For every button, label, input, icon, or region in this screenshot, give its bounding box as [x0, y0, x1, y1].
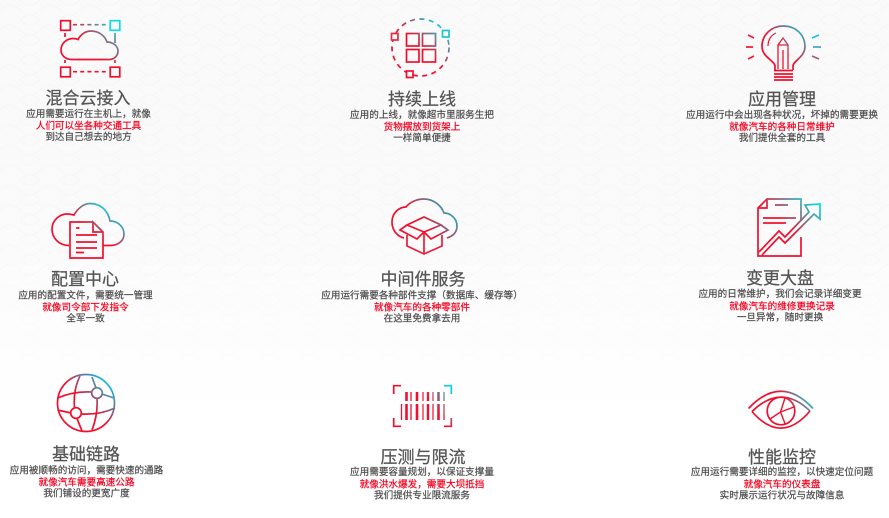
icon: globe network: [58, 374, 115, 432]
icon: cloud with document: [52, 204, 124, 258]
text block: 就像汽车的各种零部件: [374, 302, 470, 314]
icon: dashed ring with grid: [392, 19, 449, 78]
text block: 就像司令部下发指令: [42, 302, 129, 314]
heading: 配置中心: [51, 270, 119, 289]
text block: [26, 108, 151, 143]
text block: 我们提供专业限流服务: [374, 490, 470, 502]
text block: 一旦异常，随时更换: [737, 312, 824, 324]
text block: [686, 109, 878, 144]
panel: 混合云接入: [26, 21, 151, 143]
heading: 应用管理: [748, 90, 816, 109]
icon: cloud with open box: [392, 199, 457, 254]
text block: 应用运行中会出现各种状况，坏掉的需要更换: [686, 109, 878, 121]
heading: 持续上线: [388, 90, 456, 109]
text block: 到达自己想去的地方: [45, 131, 132, 143]
panel: 应用管理: [686, 26, 878, 144]
text block: 就像汽车需要高速公路: [39, 476, 135, 488]
text block: 应用被顺畅的访问，需要快速的通路: [10, 464, 164, 476]
text block: [350, 109, 494, 144]
text block: [321, 290, 523, 324]
text block: 我们铺设的更宽广度: [43, 488, 130, 500]
text block: 就像汽车的维修更换记录: [729, 300, 835, 312]
text block: 就像汽车的各种日常维护: [729, 121, 835, 133]
text block: [698, 288, 862, 324]
panel: 持续上线: [350, 19, 494, 144]
heading: 性能监控: [748, 448, 816, 467]
icon: document with rising arrow: [758, 199, 820, 256]
heading: 中间件服务: [380, 270, 466, 289]
text block: 我们提供全套的工具: [739, 132, 826, 144]
text block: 在这里免费拿去用: [384, 312, 460, 324]
text block: 应用需要运行在主机上，就像: [26, 108, 151, 120]
text block: [350, 466, 494, 502]
text block: 人们可以坐各种交通工具: [36, 120, 142, 132]
panel: 变更大盘: [698, 199, 862, 324]
text block: [10, 464, 164, 500]
panel: 性能监控: [691, 391, 874, 502]
heading: 变更大盘: [746, 269, 814, 288]
text block: 全军一致: [66, 312, 105, 324]
icon: cloud in selection frame: [61, 21, 120, 77]
text block: [691, 466, 874, 502]
heading: 混合云接入: [46, 89, 130, 108]
text block: 应用运行需要各种部件支撑（数据库、缓存等）: [321, 290, 523, 302]
icon: barcode scanner: [394, 386, 451, 426]
text block: 应用的日常维护，我们会记录详细变更: [698, 288, 862, 300]
text block: 就像汽车的仪表盘: [744, 478, 821, 490]
icon: eye with gauge: [748, 391, 813, 428]
heading: 压测与限流: [380, 448, 466, 467]
heading: 基础链路: [52, 445, 120, 464]
panel: 压测与限流: [350, 386, 494, 502]
icon: light bulb with pencil: [746, 26, 821, 80]
panel: 配置中心: [18, 204, 153, 324]
text block: 应用需要容量规划，以保证支撑量: [350, 466, 494, 478]
text block: 一样简单便捷: [393, 132, 451, 144]
text block: 货物摆放到货架上: [384, 121, 461, 133]
text block: 应用的上线，就像超市里服务生把: [350, 109, 494, 121]
text block: 就像洪水爆发，需要大坝抵挡: [360, 478, 484, 490]
text block: 实时展示运行状况与故障信息: [720, 490, 845, 502]
text block: 应用的配置文件，需要统一管理: [18, 290, 153, 302]
text block: [18, 290, 153, 324]
panel: 基础链路: [10, 374, 164, 500]
text block: 应用运行需要详细的监控，以快速定位问题: [691, 466, 874, 478]
panel: 中间件服务: [321, 199, 523, 324]
